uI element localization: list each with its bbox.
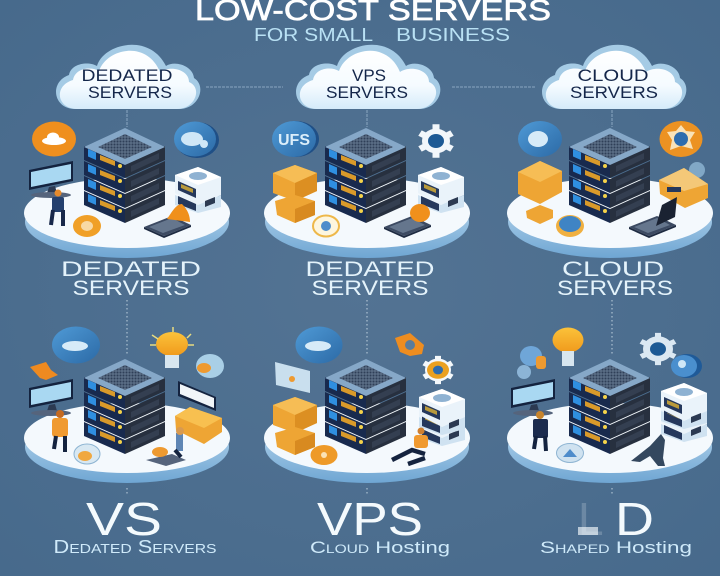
icon: monitor	[29, 161, 73, 198]
label: SERVERS	[557, 277, 673, 300]
icon: orange box	[518, 161, 562, 204]
icon: coin	[556, 215, 584, 237]
icon: blue blob	[517, 346, 546, 379]
sublabel: Shaped Hosting	[540, 538, 692, 557]
panel: VS, bottom left	[24, 326, 230, 557]
label	[557, 258, 673, 300]
server stack	[569, 128, 650, 223]
panel: VPS servers, top middle	[264, 45, 470, 300]
icon: small white server	[661, 383, 707, 442]
icon: blue badge: UFS	[278, 132, 310, 149]
icon: small white server	[175, 167, 221, 213]
cloud heading	[542, 45, 686, 109]
icon: globe coin	[74, 444, 100, 464]
platform	[507, 403, 713, 483]
label: L	[578, 493, 604, 545]
label	[578, 493, 654, 545]
platform	[24, 178, 230, 258]
platform	[264, 178, 470, 258]
subtitle: FOR SMALL	[254, 25, 373, 45]
platform	[24, 403, 230, 483]
subtitle	[254, 25, 510, 45]
icon: blue badge	[174, 122, 219, 158]
label: DEDATED	[61, 258, 201, 281]
label: D	[615, 493, 654, 545]
icon: gear	[420, 124, 452, 158]
icon: person orange	[52, 410, 68, 452]
connectors between clouds	[127, 87, 612, 495]
icon: coin	[310, 445, 338, 465]
cloud heading	[296, 45, 440, 109]
icon: gear	[641, 333, 675, 365]
icon: person	[51, 190, 64, 226]
subtitle: BUSINESS	[396, 25, 510, 45]
cloud heading	[56, 45, 200, 109]
icon: small white server	[419, 389, 465, 446]
icon: laptop	[629, 197, 677, 238]
icon: seated person with laptop	[146, 427, 186, 466]
label: SERVERS	[72, 277, 190, 300]
icon: globe coin	[556, 444, 584, 462]
icon: orange boxes	[273, 165, 317, 223]
platform	[264, 403, 470, 483]
sublabel: Cloud Hosting	[310, 538, 450, 557]
icon: blue badge	[518, 121, 562, 157]
panel: dedicated servers, top left	[24, 45, 230, 300]
icon: seated person orange	[392, 428, 428, 464]
label	[306, 258, 434, 300]
panel: cloud servers, top right	[507, 45, 713, 300]
platform	[507, 178, 713, 258]
server stack	[84, 128, 165, 223]
icon: monitor	[29, 379, 73, 416]
icon: crouching figure	[631, 434, 665, 466]
icon: ring	[313, 216, 339, 236]
icon: blue badge	[671, 354, 702, 378]
cloud heading: SERVERS	[570, 83, 658, 102]
icon: white monitor	[178, 381, 216, 411]
icon: blue badge	[296, 326, 342, 364]
cloud heading: CLOUD	[578, 66, 648, 85]
icon: lightbulb	[552, 328, 584, 366]
icon: monitor	[511, 379, 555, 416]
server stack	[84, 359, 165, 454]
icon: orange box	[175, 407, 222, 444]
label: VPS	[317, 493, 423, 545]
panel: LD, bottom right	[507, 328, 713, 557]
label: VS	[86, 493, 162, 545]
icon: blue badge	[52, 326, 100, 364]
icon: large orange box	[659, 162, 708, 208]
icon: small orange box	[526, 205, 553, 224]
label: DEDATED	[306, 258, 434, 281]
cloud heading: VPS	[352, 66, 386, 85]
server stack	[569, 359, 650, 454]
icon: small panel	[275, 362, 310, 393]
label: CLOUD	[562, 258, 664, 281]
icon: orange gear	[660, 121, 702, 157]
icon: orange cloud badge	[32, 122, 76, 156]
label: SERVERS	[312, 277, 428, 300]
icon: orange gear	[395, 333, 424, 356]
cloud heading: SERVERS	[88, 83, 172, 102]
icon: orange splat	[30, 362, 58, 380]
label	[61, 258, 201, 300]
server stack	[325, 128, 406, 223]
icon: blue badge	[272, 121, 319, 157]
panel: VPS, bottom middle	[264, 326, 470, 557]
sublabel: Dedated Servers	[54, 537, 217, 557]
icon: orange boxes	[273, 397, 317, 455]
cloud heading: DEDATED	[82, 66, 172, 85]
icon: small white server	[418, 167, 464, 213]
icon: lightbulb	[150, 327, 194, 368]
server stack	[325, 359, 406, 454]
icon: white orange gear	[424, 356, 452, 384]
icon: globe	[196, 354, 224, 378]
cloud heading: SERVERS	[326, 83, 408, 102]
icon: person navy	[533, 411, 548, 451]
icon: laptop with orange shape	[384, 204, 431, 238]
icon: orange coin	[73, 215, 101, 237]
icon: laptop with orange shape	[144, 204, 191, 238]
